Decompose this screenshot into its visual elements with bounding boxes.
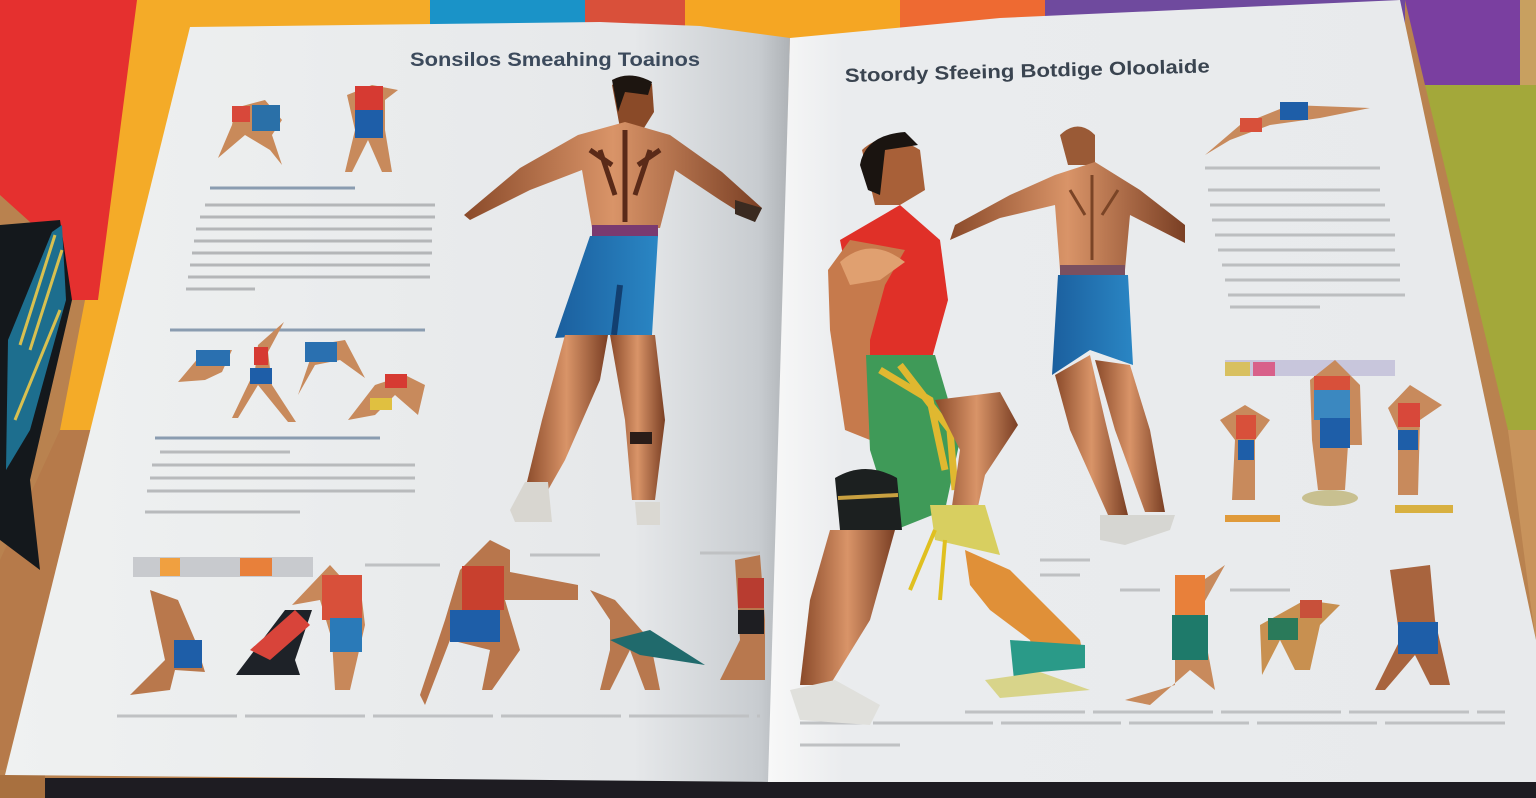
heading: left page title: Sonsilos Smeahing Toainos [410, 50, 700, 71]
figures: small exercises bottom right page [1125, 565, 1450, 705]
figures: small exercises top left page [218, 85, 398, 172]
figures: three standing figures on right page [1220, 360, 1453, 522]
text block: left page upper paragraph [186, 188, 435, 289]
figures: small exercises bottom left page [130, 540, 765, 705]
icon: kettlebell [835, 469, 902, 530]
panel: left page [5, 22, 790, 782]
text block: caption lines along page bottoms [117, 553, 1505, 745]
figures: small exercises top right page [1205, 102, 1370, 155]
legend bar: right page colour strip [1225, 360, 1395, 376]
icon: stack of books at left edge [0, 220, 72, 570]
figures: small exercises middle left page [178, 322, 425, 422]
text block: left page middle paragraph [145, 330, 425, 512]
heading: right page title: Stoordy Sfeeing Botdige Oloolaide [845, 56, 1210, 87]
figure: large side view in red shirt on right page [790, 132, 1090, 725]
panel: right page [768, 0, 1536, 782]
legend bar: left page colour strip [133, 557, 313, 577]
text block: right page upper paragraph [1205, 168, 1405, 307]
figure: large back view on left page [464, 75, 762, 525]
figure: back view on right page [950, 126, 1185, 545]
